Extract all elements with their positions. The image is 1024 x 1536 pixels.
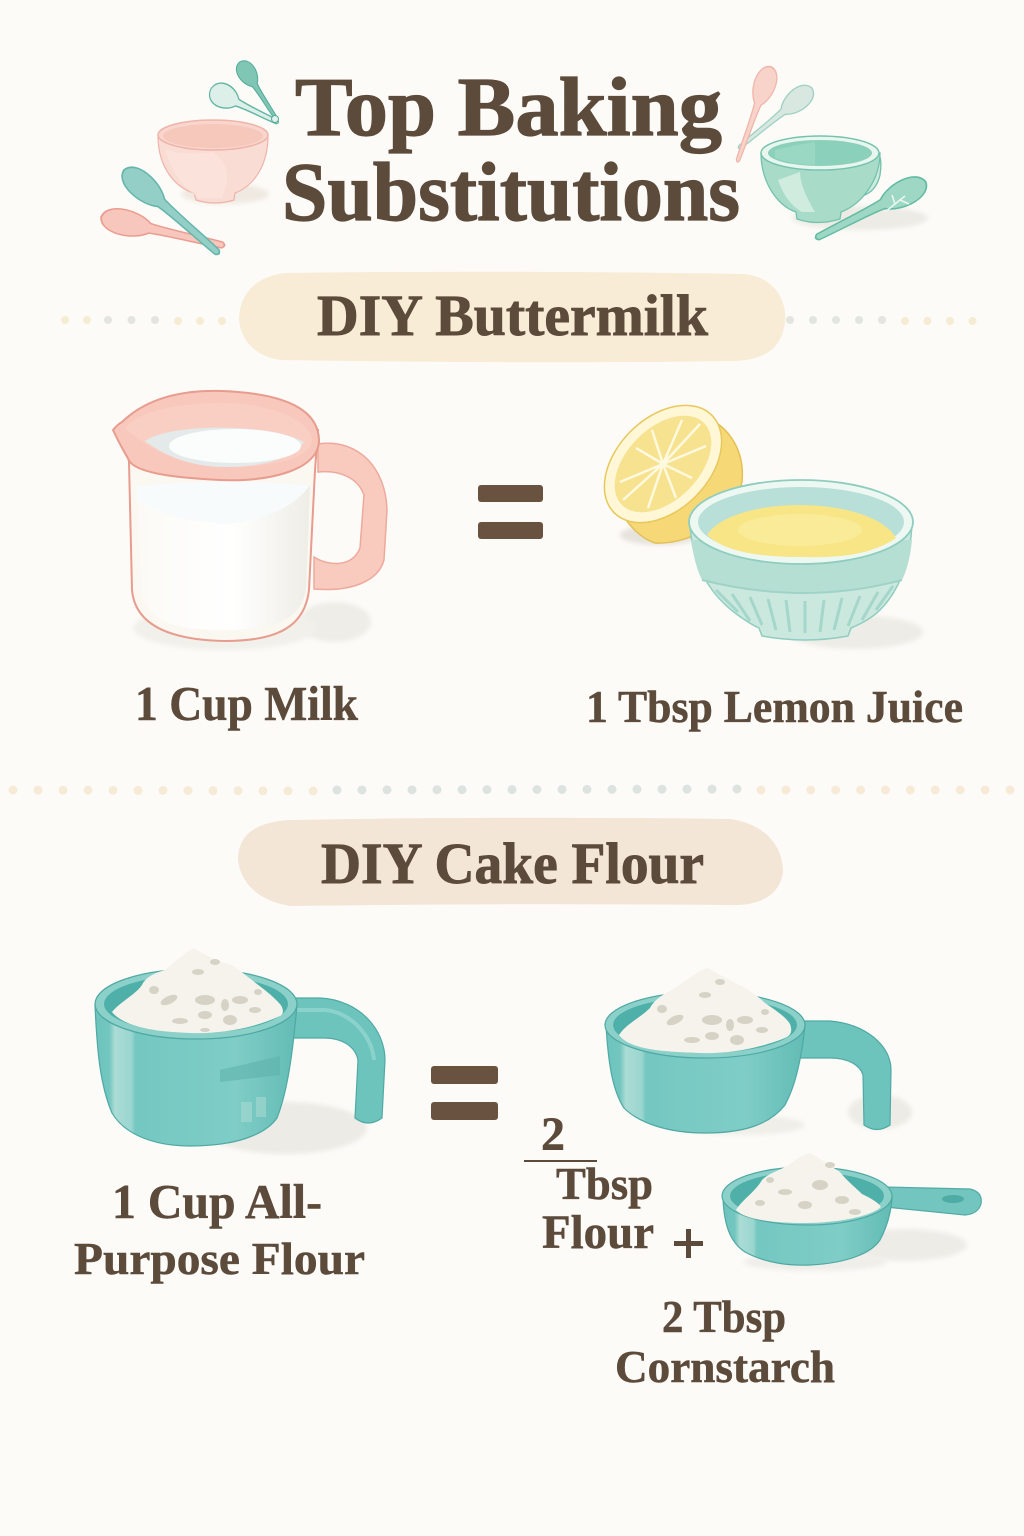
heading pill: DIY Buttermilk [239,272,785,362]
label: 2 Tbsp Cornstarch [615,1292,835,1392]
label: 2 Tbsp Flour fraction: Tbsp [556,1159,653,1209]
icon: measuring cup of flour [95,948,385,1154]
title: Top Baking [295,61,722,154]
icon: spoons top-right [727,63,819,165]
plus sign [674,1229,703,1258]
label: 2 Tbsp Flour fraction: Flour [542,1206,654,1259]
equals sign 1 [478,485,543,539]
label: 1 Cup All-Purpose Flour: Purpose Flour [74,1233,365,1284]
label: 2 Tbsp Flour fraction: 2 [541,1108,565,1161]
icon: halved lemon [582,383,744,545]
heading pill: DIY Buttermilk: DIY Buttermilk [317,283,709,348]
label: 1 Cup All-Purpose Flour [74,1174,365,1284]
label: 2 Tbsp Flour fraction [524,1108,654,1259]
label: 1 Cup Milk: 1 Cup Milk [135,676,359,731]
label: 1 Tbsp Lemon Juice: 1 Tbsp Lemon Juice [586,682,963,732]
icon: teal top-left spoons [205,57,285,133]
icon: pink bowl [158,120,269,204]
icon: cornstarch spoon [722,1153,981,1271]
equals sign 2 [431,1066,498,1120]
title [282,61,740,239]
heading pill: DIY Cake Flour [238,818,783,906]
heading pill: DIY Cake Flour: DIY Cake Flour [321,831,704,896]
icon: teal bowl of lemon juice [689,480,923,649]
icon: spoons bottom-left [98,160,227,263]
icon: flour cup on the right [605,968,912,1135]
label: 1 Cup All-Purpose Flour: 1 Cup All- [112,1174,322,1229]
icon: teal bowl with spoon [761,136,932,249]
title: Substitutions [282,146,740,239]
icon: measuring jug of milk [113,391,387,650]
label: 2 Tbsp Cornstarch: Cornstarch [615,1342,835,1392]
label: 2 Tbsp Cornstarch: 2 Tbsp [662,1292,786,1342]
